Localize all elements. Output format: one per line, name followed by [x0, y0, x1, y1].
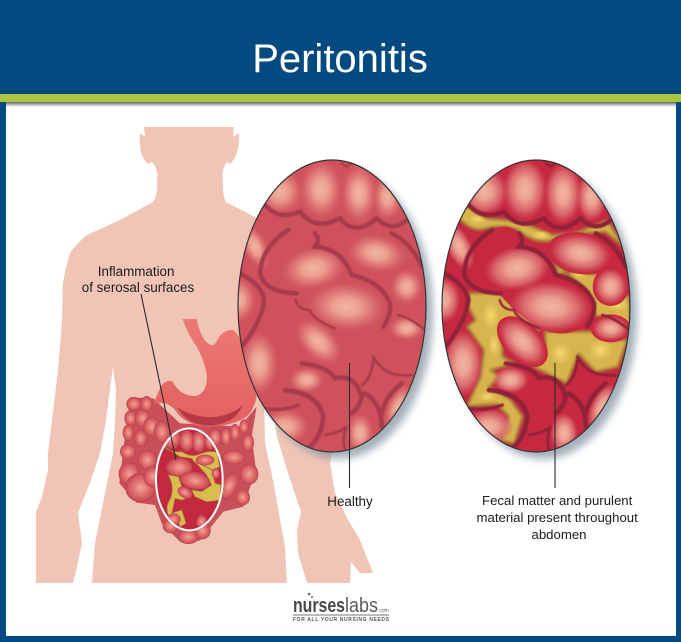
logo: nurses	[293, 595, 345, 617]
shadow below header	[6, 102, 676, 107]
green rule	[0, 94, 681, 102]
pointer: fecal matter	[554, 363, 556, 488]
title: Peritonitis	[252, 37, 428, 81]
pointer: healthy	[348, 363, 350, 488]
fecal matter and pus deposits	[460, 205, 631, 443]
logo: FOR ALL YOUR NURSING NEEDS	[293, 617, 390, 623]
label: fecal matter: Fecal matter and purulent	[482, 493, 633, 508]
label: inflammation: Inflammation	[98, 264, 174, 279]
body silhouette	[36, 127, 373, 583]
oval shadow	[245, 167, 433, 459]
label: inflammation: of serosal surfaces	[82, 280, 194, 295]
logo	[293, 593, 390, 623]
yellow highlights	[468, 215, 629, 402]
oval shadow	[449, 167, 637, 459]
digestive organs	[119, 319, 258, 544]
label: fecal matter: material present throughout	[477, 510, 638, 525]
red bowel lobes	[494, 226, 629, 367]
icon: stomach	[153, 319, 257, 427]
pointer: inflammation	[141, 294, 176, 460]
icon: colon	[119, 396, 258, 544]
label: healthy: Healthy	[327, 494, 373, 509]
inflamed area	[153, 427, 227, 533]
logo: labs	[345, 595, 378, 617]
header banner	[0, 0, 681, 94]
oval: inflamed peritoneum	[441, 159, 631, 453]
logo: .com	[378, 608, 389, 614]
label: fecal matter: abdomen	[532, 527, 586, 542]
white highlight ring	[156, 428, 223, 530]
oval: healthy peritoneum	[237, 159, 427, 453]
